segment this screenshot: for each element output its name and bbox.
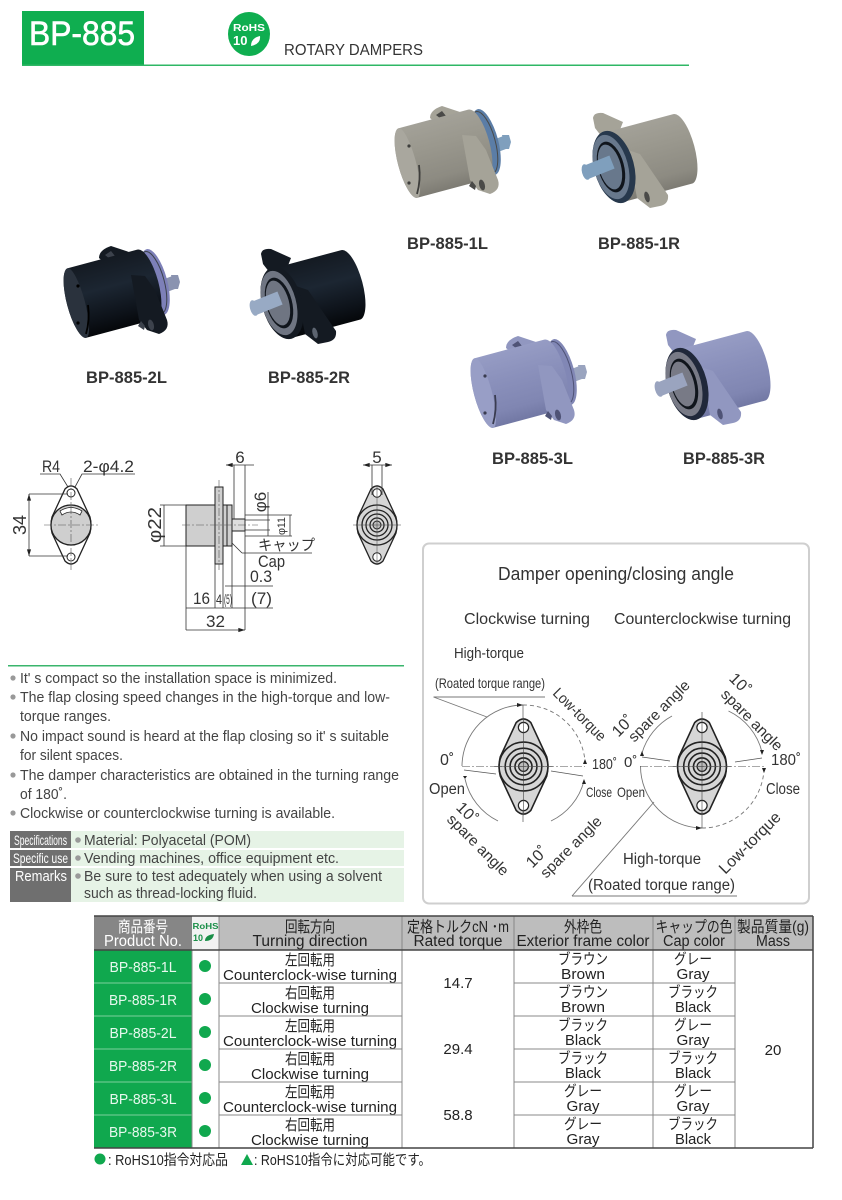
dial: clockwise: spare angle	[537, 813, 606, 882]
label: BP-885-3R: BP-885-3R	[683, 450, 765, 468]
feature list: torque ranges.	[20, 709, 111, 725]
subtitle: ROTARY DAMPERS	[284, 42, 423, 59]
dial: counterclockwise: 10˚	[725, 670, 754, 699]
table exterior frame color column: グレー	[564, 1116, 602, 1133]
table cap color column: グレー	[674, 951, 712, 968]
dial: clockwise: 10˚	[523, 843, 552, 872]
table cap color column: Gray	[676, 1032, 710, 1049]
drawing: side view with dimensions: 32	[206, 612, 225, 631]
table exterior frame color column: Black	[565, 1032, 601, 1049]
table header: RoHS	[192, 922, 219, 931]
table header	[94, 916, 813, 950]
title: BP-885 block	[22, 11, 144, 66]
icon: RoHS10 badge	[228, 12, 270, 56]
table header: Turning direction	[252, 933, 368, 950]
feature list: The flap closing speed changes in the high-torque and low-	[20, 690, 390, 706]
dial: counterclockwise: (Roated torque range)	[588, 877, 735, 894]
title: BP-885 block: BP-885	[29, 15, 135, 53]
table product column: BP-885-1R	[109, 992, 177, 1009]
product photo: BP-885-1R	[580, 111, 704, 208]
header rule	[22, 64, 689, 66]
table turning direction column: 右回転用	[285, 1117, 335, 1134]
icon: RoHS10 badge: RoHS	[233, 23, 265, 34]
table turning direction column: 右回転用	[285, 1051, 335, 1068]
table exterior frame color column: Black	[565, 1065, 601, 1082]
drawing: rear view with dimensions: 5	[372, 448, 382, 467]
specifications box	[10, 831, 404, 902]
dial: clockwise	[429, 645, 645, 882]
specifications box: Specifications	[14, 832, 67, 848]
table turning direction column: Counterclock-wise turning	[223, 1033, 397, 1050]
specifications box: Be sure to test adequately when using a solvent	[84, 869, 382, 885]
dial: counterclockwise	[572, 670, 801, 896]
table torque column: 58.8	[443, 1107, 473, 1124]
table header: Product No.	[104, 933, 182, 950]
table exterior frame color column	[558, 950, 608, 1148]
table torque column: 14.7	[443, 975, 473, 992]
feature list	[8, 665, 404, 822]
specifications box: Vending machines, office equipment etc.	[84, 851, 339, 867]
drawing: side view with dimensions: キャップ	[258, 537, 315, 554]
drawing: side view with dimensions: φ22	[145, 507, 165, 543]
dial: counterclockwise: 0˚	[624, 754, 637, 771]
feature list: No impact sound is heard at the flap closing so it' s suitable	[20, 729, 389, 745]
icon: RoHS10 badge: 10	[233, 33, 247, 48]
dial: clockwise: 180˚	[592, 756, 617, 773]
dial: clockwise: Open	[617, 784, 645, 800]
dial: clockwise: High-torque	[454, 645, 524, 662]
table turning direction column	[223, 952, 397, 1149]
drawing: front view with dimensions: 2-φ4.2	[83, 457, 134, 476]
feature list: of 180˚.	[20, 787, 67, 803]
table header: 10	[193, 933, 203, 943]
label: BP-885-2L: BP-885-2L	[86, 369, 167, 387]
dial: counterclockwise: spare angle	[625, 677, 694, 746]
drawing: side view with dimensions: φ11	[276, 517, 288, 535]
table exterior frame color column: Gray	[566, 1098, 600, 1115]
drawing: side view with dimensions: 6	[235, 448, 245, 467]
label: BP-885-3L: BP-885-3L	[492, 450, 573, 468]
dial: clockwise: 10˚	[452, 799, 481, 828]
table RoHS column	[199, 960, 211, 1137]
dial: counterclockwise: spare angle	[717, 686, 786, 755]
table header: 商品番号	[118, 918, 168, 936]
dial: counterclockwise: High-torque	[623, 851, 701, 868]
drawing: side view with dimensions: (5)	[224, 591, 232, 607]
product photo: BP-885-3L	[465, 334, 587, 430]
table cap color column: ブラック	[668, 983, 718, 1001]
feature list: Clockwise or counterclockwise turning is available.	[20, 806, 335, 822]
table header: 定格トルクcN ･m	[407, 918, 509, 936]
table cap color column: グレー	[674, 1083, 712, 1100]
table turning direction column: Clockwise turning	[251, 1000, 369, 1017]
table footnote: : RoHS10指令に対応可能です。	[254, 1152, 431, 1169]
table cap color column: Black	[675, 1065, 711, 1082]
table header: 回転方向	[285, 918, 335, 936]
table exterior frame color column: ブラウン	[558, 950, 608, 968]
table turning direction column: 右回転用	[285, 985, 335, 1002]
table torque column: 29.4	[443, 1041, 473, 1058]
drawing: side view with dimensions: φ6	[251, 492, 270, 512]
table product column	[94, 950, 192, 1148]
table exterior frame color column: Brown	[561, 999, 605, 1016]
table turning direction column: 左回転用	[285, 952, 335, 969]
dial: clockwise: Low-torque	[549, 685, 609, 745]
table turning direction column: Clockwise turning	[251, 1132, 369, 1149]
column heading: counterclockwise: Counterclockwise turning	[614, 611, 791, 628]
drawing: rear view with dimensions	[353, 448, 401, 565]
dial: clockwise: Open	[429, 781, 465, 798]
table product column: BP-885-2L	[110, 1025, 176, 1042]
table exterior frame color column: ブラック	[558, 1016, 608, 1034]
table exterior frame color column: Gray	[566, 1131, 600, 1148]
dial: counterclockwise: Close	[766, 781, 800, 798]
product photo: BP-885-3R	[653, 328, 777, 425]
label: BP-885-1L: BP-885-1L	[407, 235, 488, 253]
drawing: front view with dimensions	[10, 457, 135, 571]
table header: Mass	[756, 933, 790, 950]
table header: Rated torque	[414, 933, 502, 950]
table exterior frame color column: ブラック	[558, 1049, 608, 1067]
drawing: side view with dimensions: (7)	[251, 589, 272, 608]
drawing: front view with dimensions: R4	[42, 457, 60, 476]
table turning direction column: Counterclock-wise turning	[223, 1099, 397, 1116]
specifications box: Specific use	[13, 850, 68, 866]
table exterior frame color column: Brown	[561, 966, 605, 983]
table product column: BP-885-2R	[109, 1058, 177, 1075]
table footnote: : RoHS10指令対応品	[108, 1152, 228, 1169]
table mass column: 20	[765, 1042, 781, 1059]
table product column: BP-885-3L	[110, 1091, 176, 1108]
specifications box: Remarks	[15, 868, 67, 885]
table cap color column: Gray	[676, 1098, 710, 1115]
table header: キャップの色	[656, 918, 732, 936]
panel: damper opening/closing angle	[423, 544, 809, 904]
table product column: BP-885-3R	[109, 1124, 177, 1141]
table cap color column: Black	[675, 999, 711, 1016]
feature list: It' s compact so the installation space is minimized.	[20, 671, 337, 687]
table cap color column: Gray	[676, 966, 710, 983]
table cap color column: Black	[675, 1131, 711, 1148]
column heading: clockwise: Clockwise turning	[464, 611, 590, 628]
table header: 外枠色	[564, 918, 602, 936]
table footnote	[94, 1152, 431, 1169]
drawing: side view with dimensions: Cap	[258, 552, 285, 571]
table turning direction column: Counterclock-wise turning	[223, 967, 397, 984]
specifications box: such as thread-locking fluid.	[84, 886, 257, 902]
dial: clockwise: spare angle	[443, 811, 512, 880]
dial: counterclockwise: 10˚	[609, 712, 638, 741]
drawing: side view with dimensions: 0.3	[250, 567, 272, 586]
drawing: side view with dimensions	[145, 448, 315, 631]
table cap color column: ブラック	[668, 1049, 718, 1067]
table header: 製品質量(g)	[737, 918, 809, 936]
table: product specifications	[94, 916, 813, 1149]
table header: Cap color	[663, 933, 725, 950]
product photo: BP-885-1L	[389, 104, 511, 200]
table turning direction column: Clockwise turning	[251, 1066, 369, 1083]
panel heading: Damper opening/closing angle	[498, 564, 734, 584]
feature list: for silent spaces.	[20, 748, 123, 764]
drawing: side view with dimensions: 4	[216, 591, 222, 607]
dial: counterclockwise: Low-torque	[716, 809, 785, 878]
feature list: The damper characteristics are obtained in the turning range	[20, 768, 399, 784]
dial: counterclockwise: 180˚	[771, 752, 801, 769]
table cap color column: ブラック	[668, 1115, 718, 1133]
dial: clockwise: 0˚	[440, 752, 454, 769]
table exterior frame color column: ブラウン	[558, 983, 608, 1001]
product photo: BP-885-2R	[248, 247, 372, 344]
drawing: front view with dimensions: 34	[10, 515, 30, 535]
table cap color column: グレー	[674, 1017, 712, 1034]
product photo: BP-885-2L	[58, 244, 180, 340]
dial: clockwise: Close	[586, 784, 612, 800]
table turning direction column: 左回転用	[285, 1018, 335, 1035]
label: BP-885-1R: BP-885-1R	[598, 235, 680, 253]
label: BP-885-2R: BP-885-2R	[268, 369, 350, 387]
table torque column	[443, 975, 473, 1124]
table cap color column	[668, 951, 718, 1148]
table product column: BP-885-1L	[110, 959, 176, 976]
table header: Exterior frame color	[516, 933, 650, 950]
table exterior frame color column: グレー	[564, 1083, 602, 1100]
drawing: side view with dimensions: 16	[193, 589, 210, 608]
dial: clockwise: (Roated torque range)	[435, 675, 545, 691]
specifications box: Material: Polyacetal (POM)	[84, 833, 251, 849]
table turning direction column: 左回転用	[285, 1084, 335, 1101]
